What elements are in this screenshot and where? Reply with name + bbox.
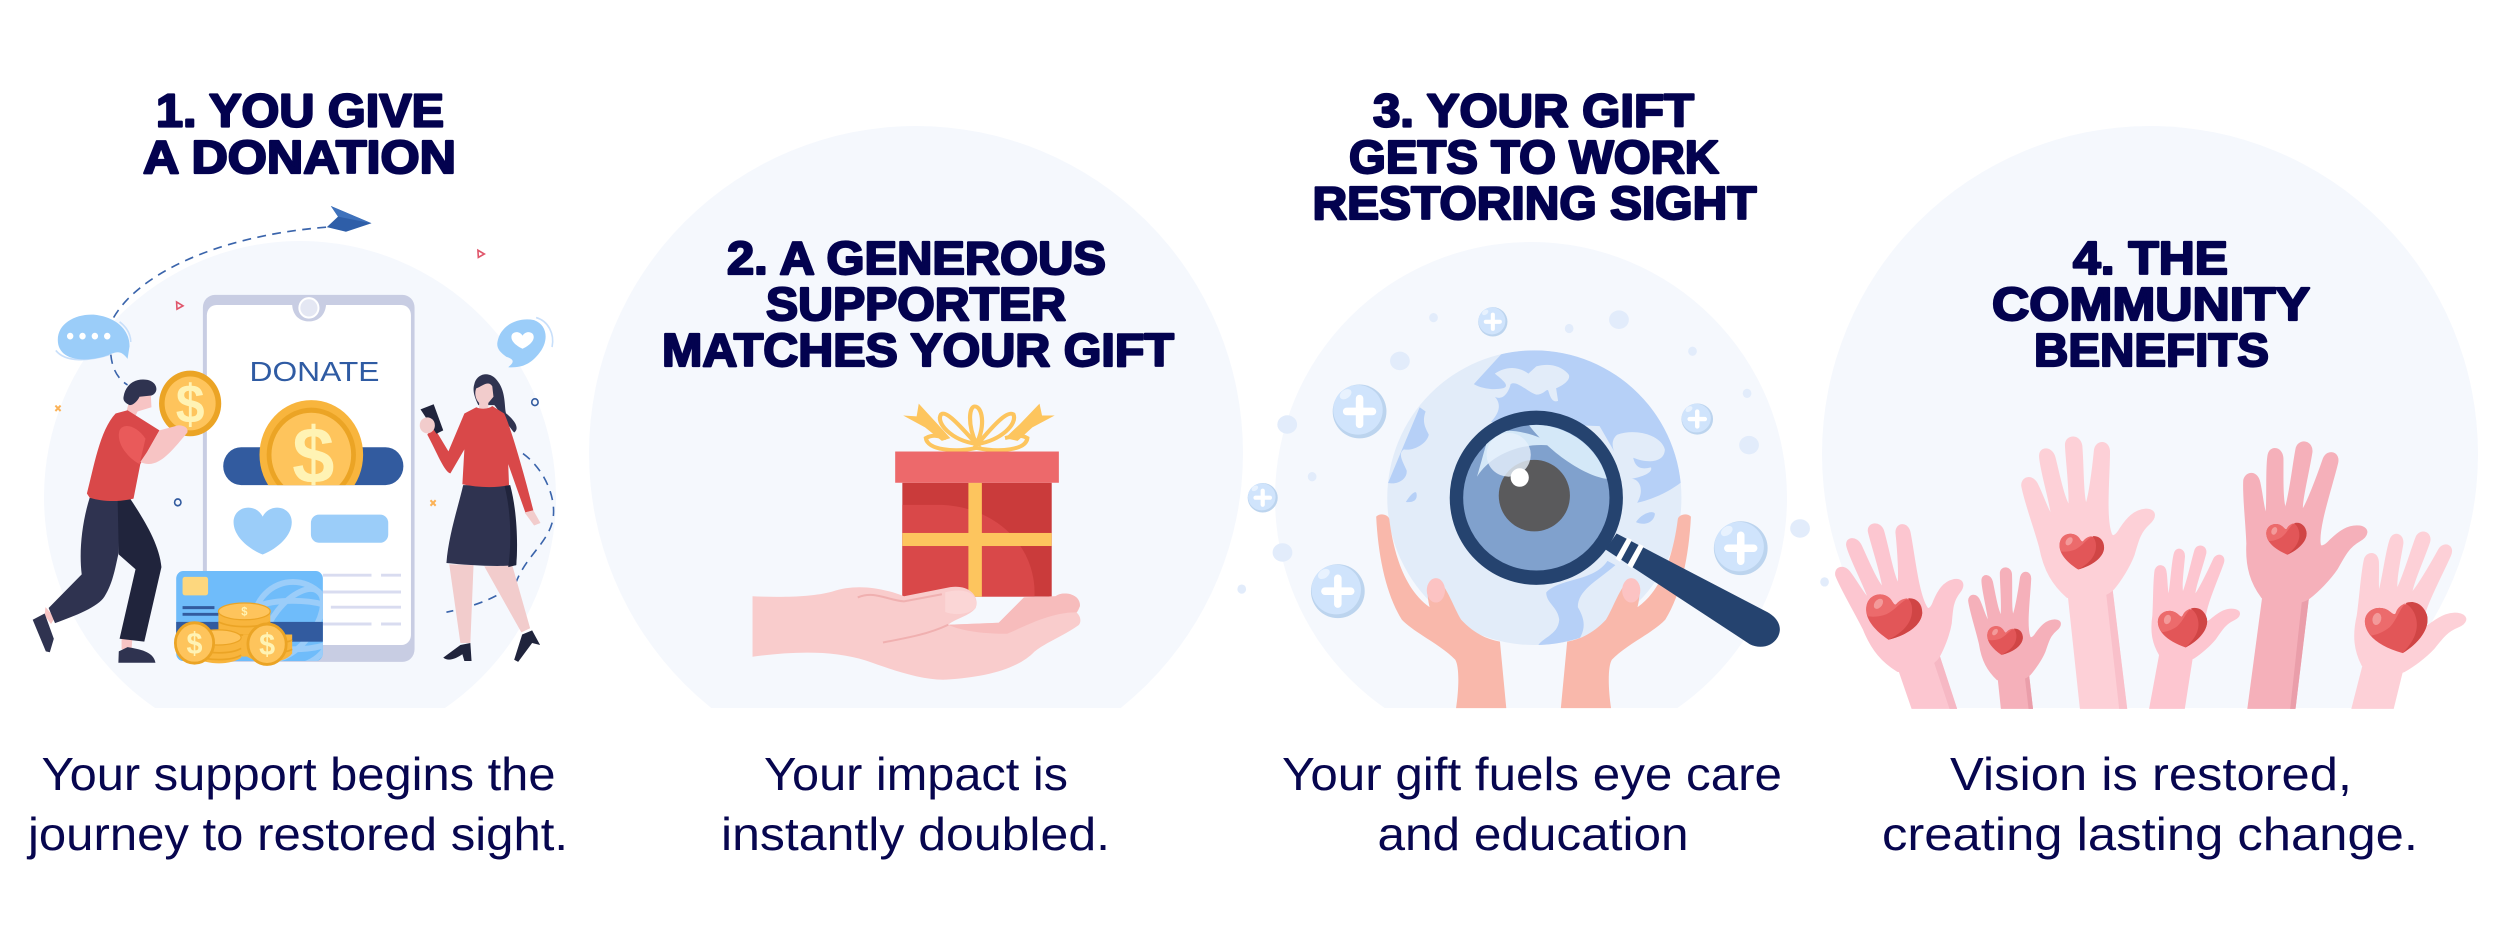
heading: step 1: A DONATION — [143, 131, 456, 183]
globe — [1387, 350, 1694, 645]
text: step 4 description: creating lasting change. — [1882, 808, 2418, 860]
text: step 1 description: Your support begins the — [42, 748, 556, 800]
text: step 3 description: Your gift fuels eye care — [1282, 748, 1782, 800]
text: step 2 description: instantly doubled. — [721, 808, 1110, 860]
DONATE label: DONATE — [250, 355, 379, 387]
heading: step 3 — [1312, 84, 1756, 229]
small decorations — [55, 250, 538, 506]
hand — [753, 587, 1080, 680]
raised hand 6 — [2325, 519, 2492, 709]
text: step 3 description: and education — [1378, 808, 1688, 860]
background circle: step 1 — [44, 241, 556, 753]
raised hand 4 — [2129, 538, 2257, 709]
coin stacks: $ — [259, 628, 275, 662]
heading: step 4: COMMUNITY — [1992, 278, 2310, 330]
text: step 1 description — [26, 748, 568, 860]
icon: speech bubble with dots — [56, 315, 131, 360]
coin stacks: $ — [241, 606, 248, 619]
phone — [203, 295, 415, 662]
raised hand 2 — [1966, 568, 2062, 709]
text: step 4 description: Vision is restored, — [1950, 748, 2352, 800]
text: step 1 description: journey to restored sight. — [26, 808, 568, 860]
person: woman with phone — [420, 374, 541, 662]
illustration: hand holding gift box — [753, 404, 1080, 680]
heading: step 2: 2. A GENEROUS — [727, 232, 1106, 284]
person: man holding coin: $ — [176, 375, 205, 436]
magnifying glass over eye — [1456, 418, 1780, 647]
text: step 3 description — [1282, 748, 1782, 860]
person: man holding coin — [33, 371, 221, 663]
heading: step 2: MATCHES YOUR GIFT — [662, 324, 1174, 376]
illustration: eye under magnifier on globe — [1237, 307, 1829, 708]
heading: step 4 — [1992, 232, 2310, 376]
heading: step 2 — [662, 232, 1174, 376]
medical plus bubbles — [1248, 307, 1768, 618]
heading: step 3: 3. YOUR GIFT — [1373, 84, 1694, 136]
heading: step 4: BENEFITS — [2034, 324, 2269, 376]
raised hand 1 — [1829, 514, 1976, 709]
coin stacks: $ — [187, 627, 203, 661]
heading: step 1 — [143, 84, 456, 183]
gift box — [895, 404, 1059, 597]
icon: speech bubble with heart — [497, 318, 553, 367]
heading: step 1: 1. YOU GIVE — [156, 84, 444, 136]
illustration: donation phone with two people — [33, 206, 554, 670]
credit card — [176, 571, 323, 661]
heading: step 4: 4. THE — [2073, 232, 2228, 284]
floating dots — [1237, 310, 1829, 594]
icon: heart — [234, 508, 292, 555]
background circle: step 2 — [589, 126, 1243, 708]
phone: $ — [292, 410, 334, 500]
coin stacks — [175, 603, 292, 664]
heading: step 2: SUPPORTER — [766, 278, 1066, 330]
raised hand 3 — [2023, 438, 2153, 709]
text: step 4 description — [1882, 748, 2418, 860]
hands cradling the globe — [1376, 514, 1691, 708]
text: step 2 description: Your impact is — [764, 748, 1068, 800]
background circle: step 3 — [1275, 242, 1787, 754]
heading: step 3: GETS TO WORK — [1349, 131, 1719, 183]
heading: step 3: RESTORING SIGHT — [1312, 177, 1756, 229]
raised hand 5 — [2219, 434, 2383, 709]
illustration: raised hands holding hearts — [1829, 434, 2492, 709]
dashed flight path — [111, 227, 554, 612]
icon: paper plane — [327, 206, 371, 232]
background circle: step 4 — [1822, 126, 2478, 708]
text: step 2 description — [721, 748, 1110, 860]
